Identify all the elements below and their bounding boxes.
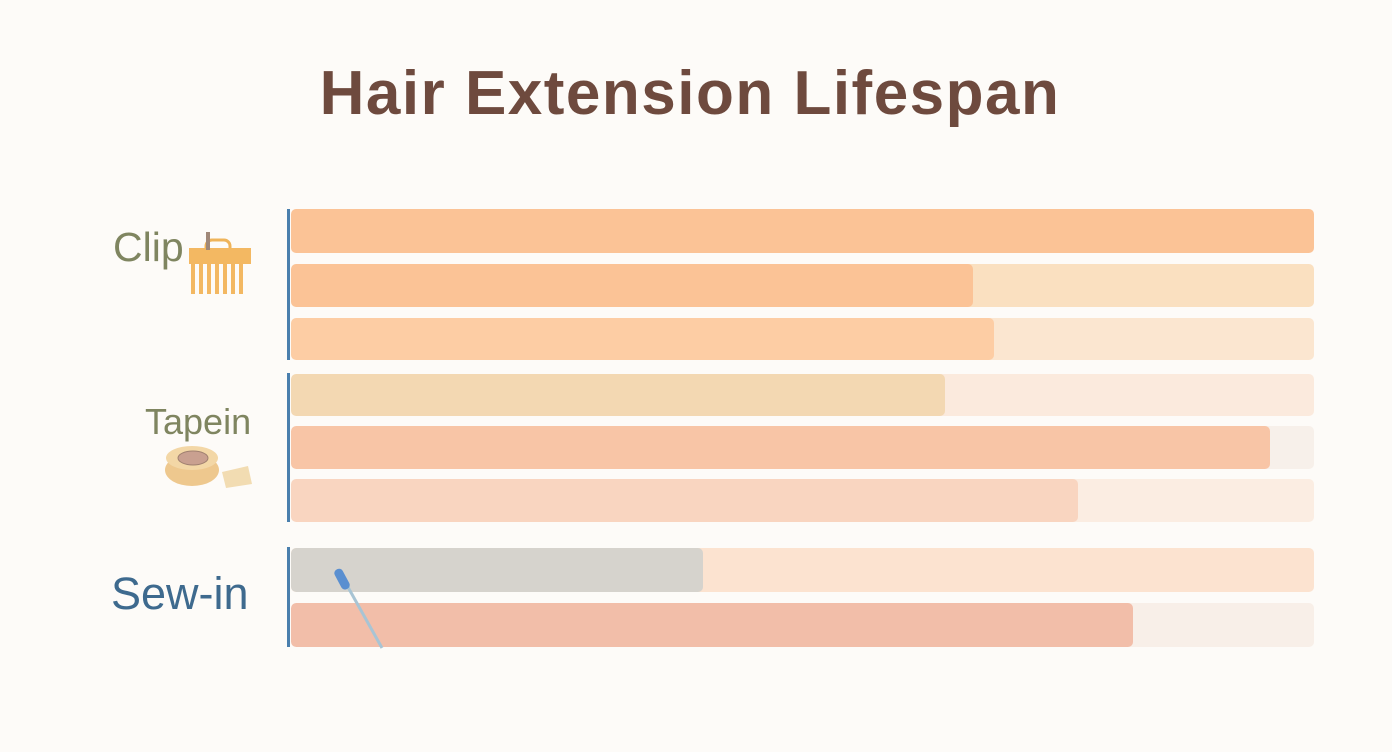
bar chart: sew rows [291, 548, 1314, 592]
bar chart: tape rows [291, 374, 1314, 416]
label: Clip-in: Clip [113, 224, 184, 270]
icon: tape roll [165, 446, 252, 488]
label: Tape-in: Tapein [145, 401, 251, 442]
label: Sew-in: Sew-in [111, 568, 249, 619]
icon: needle [334, 568, 384, 649]
title: Hair Extension Lifespan [320, 59, 1060, 128]
bar chart: clip rows [291, 209, 1314, 253]
icon: comb [189, 232, 251, 294]
axis lines [287, 209, 290, 360]
